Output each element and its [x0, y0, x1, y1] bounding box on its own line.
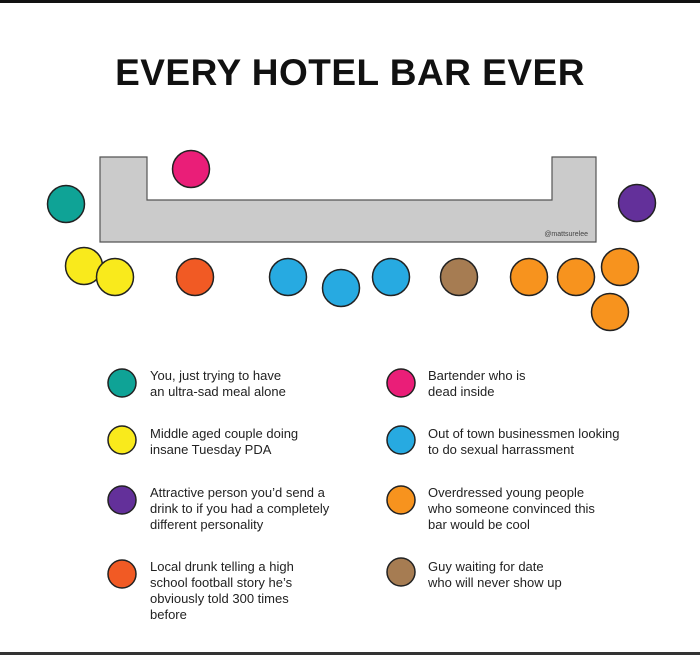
legend text: couple — [150, 426, 298, 457]
bottom border — [0, 652, 700, 655]
top border — [0, 0, 700, 3]
legend text: couple: insane Tuesday PDA — [150, 442, 271, 457]
title: EVERY HOTEL BAR EVER — [115, 52, 585, 93]
people circles — [48, 150, 656, 330]
legend text: guy: who will never show up — [428, 575, 562, 590]
legend text: young people: Overdressed young people — [428, 485, 584, 500]
legend text: attractive — [150, 485, 330, 532]
legend text: bartender: Bartender who is — [428, 368, 526, 383]
legend text: drunk: Local drunk telling a high — [150, 559, 294, 574]
legend text: businessmen: Out of town businessmen looking — [428, 426, 620, 441]
legend text: guy: Guy waiting for date — [428, 559, 544, 574]
legend text: you: an ultra-sad meal alone — [150, 384, 286, 399]
legend text: you — [150, 368, 286, 399]
legend text: young people: bar would be cool — [428, 517, 530, 532]
legend text: drunk: before — [150, 607, 187, 622]
legend text: attractive: different personality — [150, 517, 263, 532]
legend text: couple: Middle aged couple doing — [150, 426, 298, 441]
legend text: drunk — [150, 559, 294, 622]
legend circles — [108, 369, 415, 588]
bar counter — [100, 157, 596, 242]
legend text: bartender: dead inside — [428, 384, 494, 399]
legend text: attractive: drink to if you had a completely — [150, 501, 329, 516]
legend text: bartender — [428, 368, 526, 399]
legend text: drunk: school football story he’s — [150, 575, 292, 590]
legend text: young people — [428, 485, 595, 532]
legend text: drunk: obviously told 300 times — [150, 591, 289, 606]
legend text: businessmen: to do sexual harrassment — [428, 442, 574, 457]
legend text: guy — [428, 559, 562, 590]
legend text: attractive: Attractive person you’d send a — [150, 485, 325, 500]
legend text: you: You, just trying to have — [150, 368, 281, 383]
bar counter: @mattsurelee — [544, 231, 588, 238]
legend text: young people: who someone convinced this — [428, 501, 595, 516]
legend text: businessmen — [428, 426, 620, 457]
